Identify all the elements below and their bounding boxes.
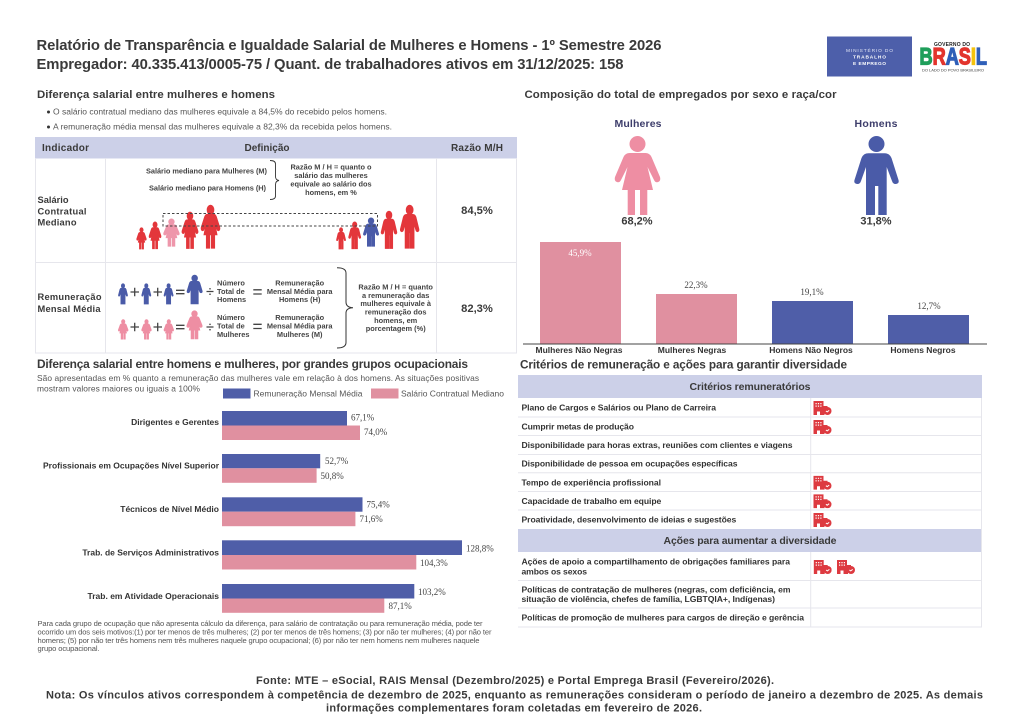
fórmula: homens [118, 275, 333, 304]
title [36, 38, 662, 73]
lista de critérios: Cumprir metas de produção [522, 421, 634, 431]
chave e definição da razão: mulheres equivale à [360, 299, 432, 308]
pictograma: homens ordenados por salário [336, 206, 419, 249]
gráfico de colunas: sexo e raça/cor: 19,1% [800, 287, 824, 297]
rodapé: fonte e nota [46, 675, 983, 714]
heading: composição: Composição do total de empregados por sexo e raça/cor [524, 89, 837, 101]
indicator: remuneração mensal média [38, 292, 102, 314]
title: Empregador: 40.335.413/0005-75 / Quant. de trabalhadores ativos em 31/12/2025: 158 [36, 57, 624, 73]
chave e definição da razão: porcentagem (%) [366, 324, 426, 333]
bullet list: O salário contratual mediano das mulheres equivale a 84,5% do recebido pelos homens. [53, 106, 387, 116]
panel: critérios remuneratórios e ações [518, 375, 982, 627]
fórmula: homens: Número [217, 278, 245, 288]
lista de ações: Ações de apoio a compartilhamento de obrigações familiares para [522, 557, 790, 567]
lista de critérios: Capacidade de trabalho em equipe [522, 496, 662, 506]
icon: empresa com selo (ações) [814, 560, 855, 574]
seleção pontilhada da mediana [163, 214, 378, 226]
heading: critérios: Critérios de remuneração e ações para garantir diversidade [520, 358, 847, 372]
indicator: remuneração mensal média: Mensal Média [38, 304, 101, 314]
fórmula: homens: Remuneração [275, 278, 325, 288]
pictograma: mulheres 68,2%: 68,2% [621, 216, 653, 228]
pictograma: homens 31,8% [854, 118, 899, 228]
gráfico de colunas: sexo e raça/cor [523, 242, 987, 355]
icon: empresa com selo (critérios) [814, 401, 832, 527]
definição: salário mediano: Salário mediano para Homens (H) [149, 184, 267, 192]
lista de ações: situação de violência, chefes de família, LGBTQIA+, Indígenas) [522, 594, 775, 604]
grupo: atividade operacionais: 87,1% [388, 601, 412, 611]
fórmula: homens: Total de [217, 287, 245, 296]
definição: salário mediano [146, 160, 372, 200]
grupo: profissionais nível superior: 50,8% [320, 471, 344, 481]
grupo: técnicos de nível médio: 75,4% [366, 500, 390, 510]
bullet list: A remuneração média mensal das mulheres equivale a 82,3% da recebida pelos homens. [53, 122, 392, 132]
lista de ações: Políticas de contratação de mulheres (negras, com deficiência, em [522, 584, 791, 594]
grupo: atividade operacionais: Trab. em Atividade Operacionais [88, 591, 219, 601]
logo: governo do Brasil: BRASIL [920, 44, 987, 70]
lista de critérios: Disponibilidade de pessoa em ocupações específicas [522, 459, 738, 469]
gráfico de barras: grupos ocupacionais [43, 411, 494, 613]
indicator: remuneração mensal média: Remuneração [38, 292, 102, 302]
grupo: técnicos de nível médio [120, 497, 390, 526]
heading: grupos ocupacionais: Diferença salarial entre homens e mulheres, por grandes grupos ocupacionais [37, 357, 468, 371]
fórmula: mulheres: Remuneração [275, 313, 325, 322]
cabeçalho: critérios: Critérios remuneratórios [690, 381, 811, 393]
grupo: profissionais nível superior: Profissionais em Ocupações Nível Superior [43, 460, 220, 470]
definição: salário mediano: salário das mulheres [294, 171, 368, 180]
nota de rodapé do gráfico: grupo ocupacional. [38, 644, 100, 653]
heading: diferença salarial: Diferença salarial entre mulheres e homens [37, 89, 275, 101]
gráfico de colunas: sexo e raça/cor: Homens Negros [890, 345, 956, 355]
chave e definição da razão: Razão M / H = quanto [358, 282, 433, 292]
gráfico de colunas: sexo e raça/cor: Mulheres Não Negras [536, 345, 623, 355]
title: Relatório de Transparência e Igualdade Salarial de Mulheres e Homens - 1º Semestre 2026 [36, 38, 662, 54]
lista de ações: Políticas de promoção de mulheres para cargos de direção e gerência [522, 613, 804, 623]
lista de ações [522, 557, 804, 623]
legenda: Remuneração Mensal Média [254, 388, 363, 398]
nota de rodapé do gráfico: ocorrido um dos seis motivos:(1) por ter menos de três mulheres; (2) por ter menos de três homens; (3) por não ter mulheres; (4) por não ter [38, 628, 492, 636]
grupo: técnicos de nível médio: Técnicos de Nível Médio [120, 504, 219, 514]
cabeçalho: ações: Ações para aumentar a diversidade [664, 535, 837, 547]
fórmula: homens: Mensal Média para [267, 287, 333, 296]
logo: ministério [827, 36, 912, 76]
indicator: salário contratual mediano [38, 195, 86, 228]
rodapé: fonte e nota: Fonte: MTE – eSocial, RAIS Mensal (Dezembro/2025) e Portal Emprega Brasil (Fevereiro/2026). [256, 675, 774, 687]
indicator: salário contratual mediano: Salário [38, 195, 69, 205]
fórmula: mulheres [118, 311, 333, 339]
definição: salário mediano: homens, em % [305, 188, 357, 197]
lista de critérios: Disponibilidade para horas extras, reuniões com clientes e viagens [522, 440, 793, 450]
pictograma: homens 31,8%: 31,8% [860, 216, 892, 228]
bullet list [47, 106, 392, 132]
lista de critérios [522, 402, 793, 525]
panel: tabela de indicadores: Definição [244, 143, 290, 154]
definição: salário mediano: equivale ao salário dos [290, 180, 372, 188]
grupo: profissionais nível superior [43, 454, 349, 483]
lista de critérios: Tempo de experiência profissional [522, 477, 661, 487]
grupo: profissionais nível superior: 52,7% [325, 456, 349, 466]
rodapé: fonte e nota: informações complementares foram coletadas em fevereiro de 2026. [326, 702, 702, 714]
texto explicativo: mostram valores maiores ou iguais a 100% [37, 384, 201, 394]
panel: tabela de indicadores: Razão M/H [451, 143, 503, 154]
legenda [223, 388, 504, 398]
fórmula: homens: Homens (H) [279, 295, 321, 304]
valor: razão remuneração: 82,3% [461, 303, 493, 315]
logo: ministério: MINISTÉRIO DO [846, 47, 893, 54]
grupo: atividade operacionais [88, 584, 446, 613]
grupo: técnicos de nível médio: 71,6% [360, 514, 383, 524]
pictograma: homens 31,8%: Homens [854, 118, 898, 130]
fórmula: mulheres: Total de [217, 322, 245, 330]
panel: tabela de indicadores [35, 137, 517, 353]
indicator: salário contratual mediano: Contratual [38, 206, 86, 216]
grupo: serviços administrativos [82, 540, 494, 570]
grupo: dirigentes e gerentes: Dirigentes e Gerentes [131, 417, 219, 427]
gráfico de colunas: sexo e raça/cor: Homens Não Negros [769, 345, 853, 355]
grupo: serviços administrativos: 104,3% [420, 558, 448, 568]
grupo: serviços administrativos: Trab. de Serviços Administrativos [82, 548, 219, 558]
lista de critérios: Proatividade, desenvolvimento de ideias e sugestões [522, 515, 737, 525]
gráfico de colunas: sexo e raça/cor: 45,9% [568, 248, 592, 258]
grupo: dirigentes e gerentes: 74,0% [364, 427, 388, 437]
logo: ministério: E EMPREGO [853, 61, 886, 67]
texto explicativo [37, 373, 479, 394]
chave e definição da razão [337, 268, 433, 348]
chave e definição da razão: a remuneração das [362, 291, 429, 300]
panel: tabela de indicadores: Indicador [42, 143, 89, 154]
logo: ministério: TRABALHO [853, 54, 886, 60]
grupo: dirigentes e gerentes [131, 411, 388, 440]
grupo: dirigentes e gerentes: 67,1% [351, 412, 375, 422]
fórmula: mulheres: Mensal Média para [267, 322, 333, 330]
nota de rodapé do gráfico [38, 619, 492, 653]
rodapé: fonte e nota: Nota: Os vínculos ativos correspondem à competência de dezembro de 2025, enquanto as remunerações consideram o período de janeiro a dezembro de 2025. As demais [46, 690, 983, 702]
indicator: salário contratual mediano: Mediano [38, 218, 77, 228]
definição: salário mediano: Razão M / H = quanto o [290, 162, 372, 172]
gráfico de colunas: sexo e raça/cor: Mulheres Negras [658, 345, 727, 355]
valor: razão salário: 84,5% [461, 205, 493, 217]
pictograma: mulheres ordenadas por salário [137, 206, 220, 249]
pictograma: mulheres 68,2%: Mulheres [614, 118, 662, 130]
lista de ações: ambos os sexos [522, 567, 587, 577]
nota de rodapé do gráfico: homens; (5) por não ter três homens nem três mulheres naquele grupo ocupacional; (6) por não ter nem homens nem mulheres naquele [38, 636, 480, 645]
logo: governo do Brasil: DO LADO DO POVO BRASILEIRO [922, 68, 984, 72]
fórmula: mulheres: Mulheres [217, 330, 249, 339]
chave e definição da razão: remuneração dos [365, 308, 427, 316]
fórmula: mulheres: Número [217, 313, 245, 322]
gráfico de colunas: sexo e raça/cor: 12,7% [917, 301, 941, 311]
legenda: Salário Contratual Mediano [401, 388, 504, 398]
pictograma: mulheres 68,2% [614, 118, 662, 228]
definição: salário mediano: Salário mediano para Mulheres (M) [146, 166, 268, 176]
fórmula: mulheres: Mulheres (M) [277, 330, 323, 339]
texto explicativo: São apresentadas em % quanto a remuneração das mulheres vale em relação à dos homens. As situações positivas [37, 373, 479, 383]
chave e definição da razão: homens, em [374, 316, 418, 325]
fórmula: homens: Homens [217, 295, 246, 304]
lista de critérios: Plano de Cargos e Salários ou Plano de Carreira [522, 402, 716, 412]
grupo: atividade operacionais: 103,2% [418, 587, 446, 597]
logo: governo do Brasil: GOVERNO DO [934, 42, 970, 48]
grupo: serviços administrativos: 128,8% [466, 543, 494, 553]
nota de rodapé do gráfico: Para cada grupo de ocupação que não apresenta cálculo da diferença, para salário de contratação ou para remuneração média, pode ter [38, 619, 483, 628]
gráfico de colunas: sexo e raça/cor: 22,3% [684, 280, 708, 290]
